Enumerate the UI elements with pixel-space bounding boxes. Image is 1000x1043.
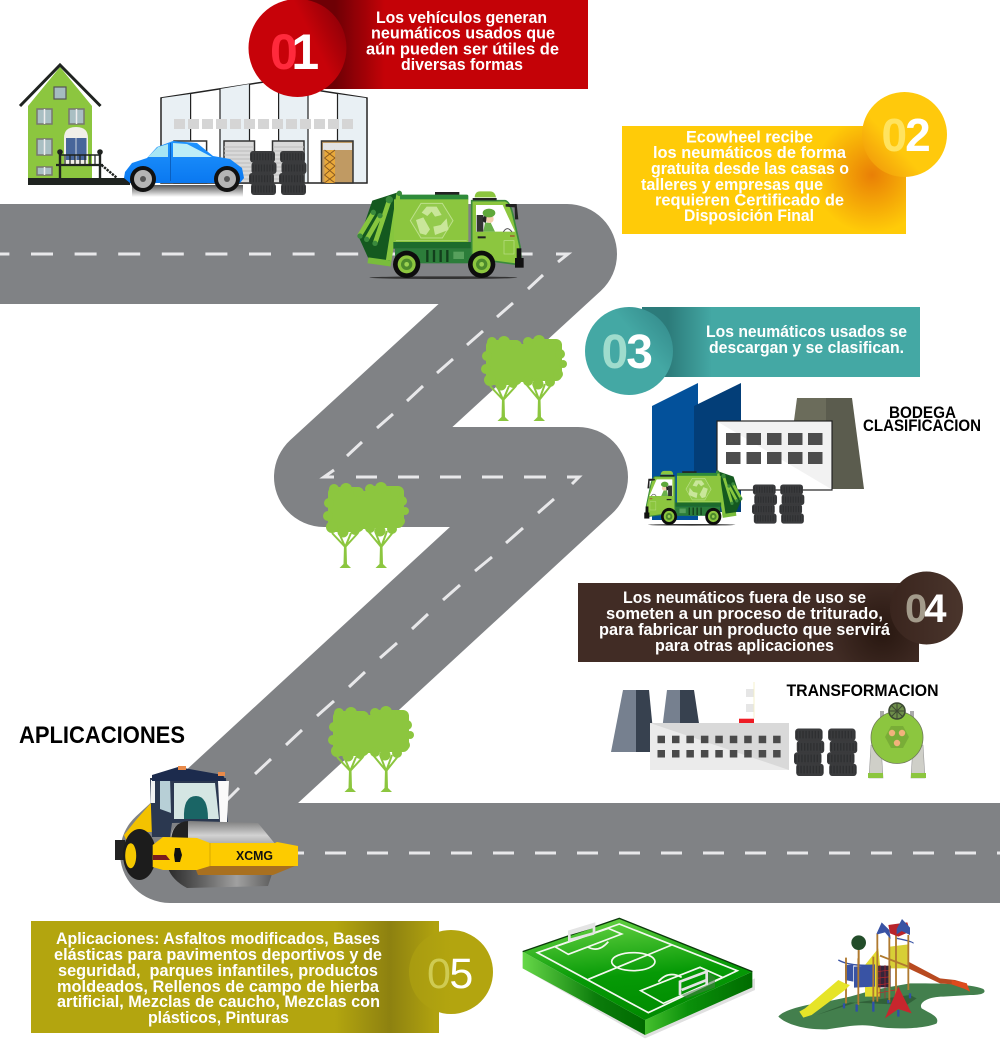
- car: [124, 141, 244, 197]
- panel 02: [622, 92, 947, 234]
- soccer field: [523, 918, 755, 1038]
- warehouse classification building: [652, 383, 864, 520]
- small truck: [644, 470, 742, 526]
- number badge 03: [585, 307, 673, 395]
- text 05: elásticas para pavimentos deportivos y de: [54, 945, 382, 964]
- text 04: para fabricar un producto que servirá: [599, 620, 891, 639]
- text 05: seguridad, parques infantiles, productos: [58, 961, 378, 980]
- road roller: [115, 766, 298, 888]
- playground: [778, 919, 985, 1029]
- text 05: plásticos, Pinturas: [148, 1008, 289, 1027]
- text 02: Ecowheel recibe: [686, 128, 813, 146]
- road centre dashes: [0, 254, 1000, 853]
- porch railing: [56, 152, 117, 178]
- brand text: XCMG: [236, 848, 273, 863]
- tires in front of car: [249, 151, 306, 195]
- text 01: neumáticos usados que: [371, 24, 555, 42]
- shredder tank: [868, 703, 926, 778]
- tires at bodega: [752, 484, 804, 524]
- number badge 03: 03: [602, 326, 651, 379]
- factory: [611, 682, 789, 770]
- text 02: los neumáticos de forma: [653, 143, 847, 162]
- garbage truck on road: [357, 191, 524, 279]
- panel 03: [585, 307, 920, 395]
- panel 05: [31, 921, 493, 1033]
- text 03: Los neumáticos usados se: [706, 322, 907, 341]
- text 05: [54, 929, 382, 1027]
- text 04: para otras aplicaciones: [655, 636, 834, 655]
- text 05: Aplicaciones: Asfaltos modificados, Bases: [56, 929, 380, 948]
- text 02: requieren Certificado de: [655, 190, 844, 210]
- panel 01: [248, 0, 588, 97]
- panel 04: [578, 572, 963, 662]
- number badge 02: [862, 92, 947, 177]
- text 03: descargan y se clasifican.: [709, 338, 904, 357]
- number badge 04: 04: [905, 587, 947, 631]
- road: [0, 254, 1000, 853]
- text 02: Disposición Final: [684, 206, 814, 225]
- text 02: [641, 128, 849, 225]
- number badge 01: 01: [270, 24, 318, 80]
- text 01: Los vehículos generan: [376, 8, 547, 27]
- text 01: aún pueden ser útiles de: [366, 40, 559, 58]
- text 02: gratuita desde las casas o: [651, 159, 849, 178]
- text 05: artificial, Mezclas de caucho, Mezclas con: [57, 992, 380, 1011]
- text 04: someten a un proceso de triturado,: [606, 604, 883, 623]
- text 01: [366, 8, 559, 74]
- text 04: [599, 588, 891, 655]
- trees middle: [323, 482, 409, 568]
- trees upper: [481, 335, 567, 421]
- label: bodega clasificacion: [863, 403, 981, 435]
- number badge 05: 05: [427, 950, 472, 998]
- label: bodega clasificacion: CLASIFICACION: [863, 416, 981, 435]
- label: transformacion: TRANSFORMACION: [786, 682, 938, 700]
- text 04: Los neumáticos fuera de uso se: [623, 588, 866, 607]
- trees lower: [328, 706, 414, 792]
- house: [20, 65, 130, 185]
- number badge 05: [409, 930, 493, 1014]
- number badge 04: [890, 572, 963, 644]
- text 05: moldeados, Rellenos de campo de hierba: [57, 977, 380, 996]
- text 02: talleres y empresas que: [641, 175, 823, 194]
- tires at factory: [794, 728, 857, 776]
- number badge 01: [248, 0, 346, 97]
- text 01: diversas formas: [401, 55, 523, 74]
- heading: aplicaciones: APLICACIONES: [19, 722, 185, 749]
- label: bodega clasificacion: BODEGA: [889, 403, 956, 422]
- text 03: [706, 322, 907, 357]
- number badge 02: 02: [882, 109, 929, 161]
- warehouse: [161, 82, 367, 183]
